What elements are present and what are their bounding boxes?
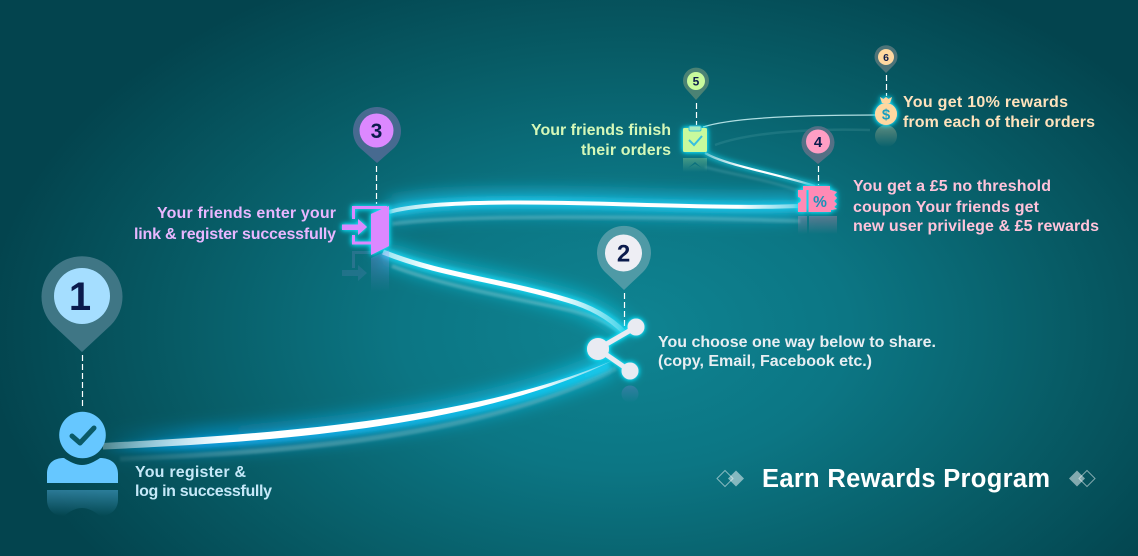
step 4: label: coupon Your friends get [853,199,1040,216]
step 4: label: You get a £5 no threshold [853,178,1051,195]
step 4: coupon icon [798,186,837,234]
step 4: coupon icon: % [813,194,827,211]
thin path: step 5 to step 6 [703,115,876,145]
step 5: label [531,122,671,159]
step 2: pin [597,226,651,327]
step 6: label [903,94,1095,131]
step 1: user icon [47,412,118,516]
step 5: pin: 5 [693,74,700,88]
step 1: label: You register & [135,464,246,481]
step 5: clipboard icon [683,126,707,172]
step 2: pin: 2 [617,240,630,268]
step 6: pin: 6 [883,52,889,64]
step 6: label: You get 10% rewards [903,94,1068,111]
step 4: label: new user privilege & £5 rewards [853,218,1099,235]
step 2: label: You choose one way below to share. [658,334,936,351]
glowing path: step 1 to step 2 [103,359,616,459]
step 3: door icon [342,206,389,292]
step 2: label: (copy, Email, Facebook etc.) [658,353,872,370]
step 5: label: Your friends finish [531,122,671,139]
step 1: pin: 1 [69,275,91,319]
step 1: pin [41,256,122,408]
step 6: money bag icon [875,97,897,147]
title with diamonds: Earn Rewards Program [762,465,1050,493]
step 3: pin: 3 [371,120,382,143]
step 1: label: log in successfully [135,483,272,500]
step 3: label [134,205,336,243]
step 3: label: Your friends enter your [157,205,336,222]
step 3: label: link & register successfully [134,226,336,243]
step 5: label: their orders [581,142,671,159]
thin path: step 4 to step 5 [705,153,815,193]
step 2: label [658,334,936,370]
step 6: label: from each of their orders [903,114,1095,131]
glowing path: step 3 to step 4 [389,202,800,224]
step 4: pin: 4 [814,134,823,151]
step 1: label [135,464,272,500]
glowing path: step 2 to step 3 [383,252,624,333]
step 3: pin [353,107,401,204]
step 2: share icon [587,318,644,402]
step 5: pin [683,68,709,125]
step 6: pin [874,45,898,96]
step 4: label [853,178,1099,235]
step 4: pin [802,126,834,185]
step 6: money bag icon: $ [882,106,891,124]
